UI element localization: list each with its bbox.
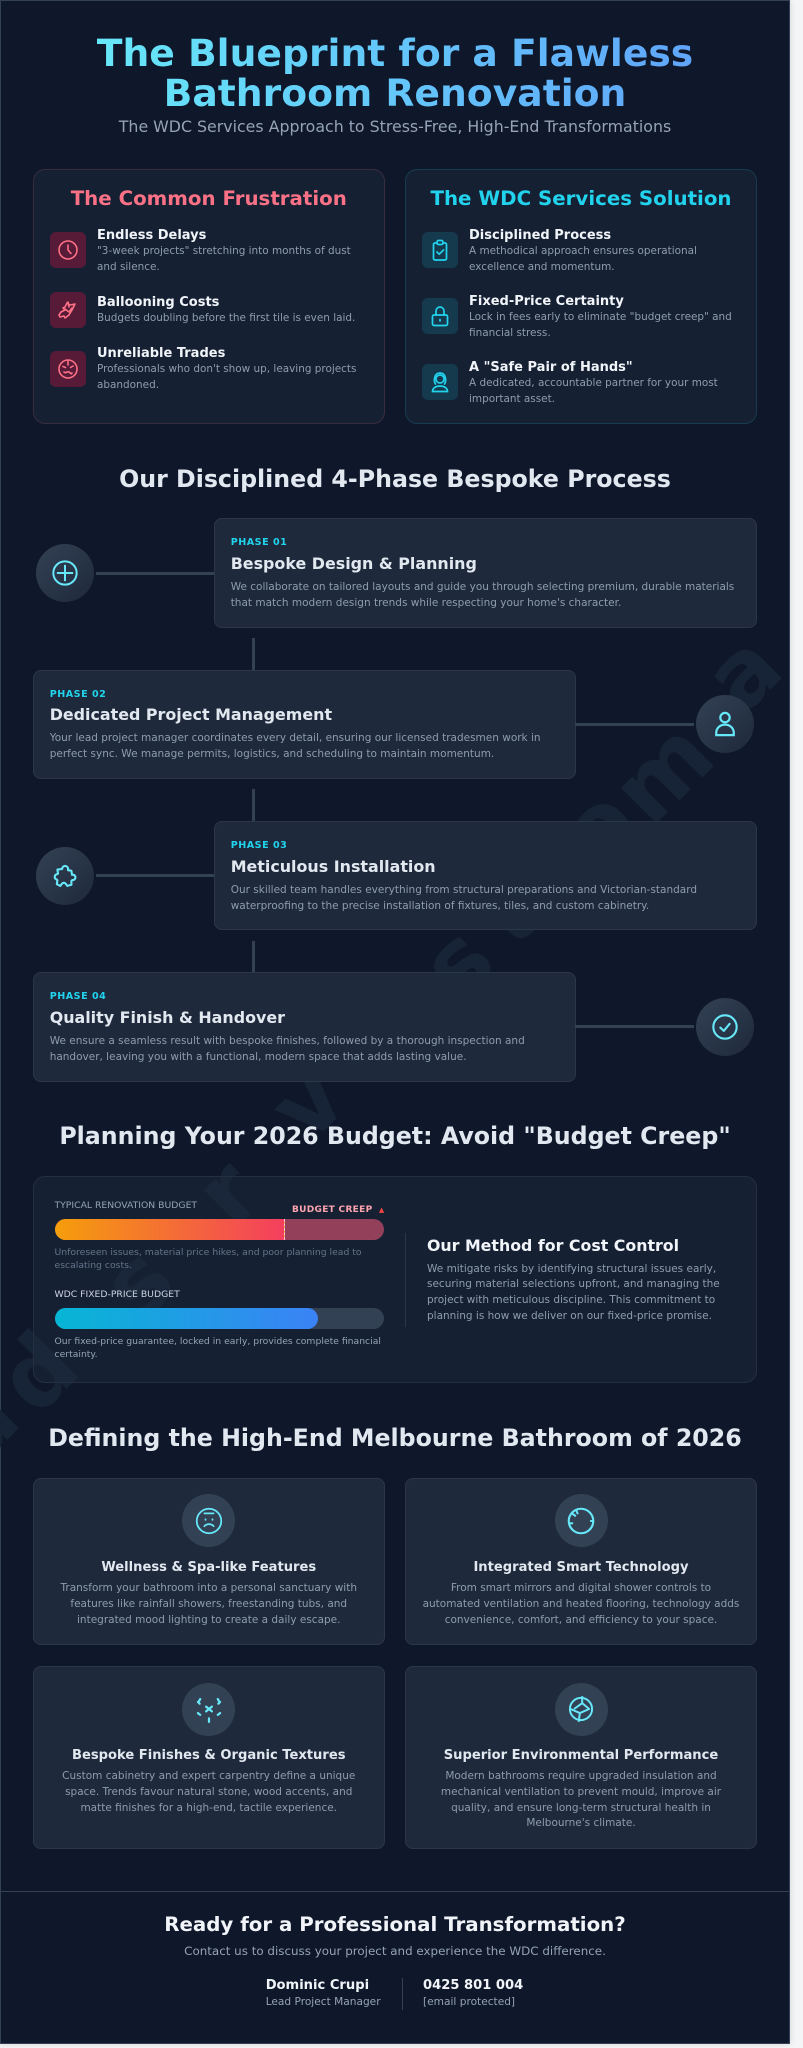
phase text: Our skilled team handles everything from structural preparations and Victorian-standard bbox=[231, 884, 697, 896]
phase title: Bespoke Design & Planning bbox=[231, 554, 477, 573]
item text: Lock in fees early to eliminate "budget creep" and bbox=[469, 311, 732, 323]
item heading: Disciplined Process bbox=[469, 228, 611, 243]
item text bbox=[97, 245, 351, 273]
method text: We mitigate risks by identifying structural issues early, bbox=[427, 1262, 716, 1274]
card text bbox=[441, 1770, 722, 1829]
item text: Professionals who don't show up, leaving projects bbox=[97, 363, 356, 375]
phase text: perfect sync. We manage permits, logistics, and scheduling to maintain momentum. bbox=[50, 748, 494, 760]
bar caption bbox=[54, 1336, 381, 1360]
panel heading: The Common Frustration bbox=[71, 187, 347, 210]
bar caption: Unforeseen issues, material price hikes, and poor planning lead to bbox=[54, 1246, 362, 1258]
card text bbox=[62, 1770, 355, 1814]
title: Bathroom Renovation bbox=[164, 71, 626, 115]
phase label: PHASE 04 bbox=[50, 990, 106, 1002]
item text: excellence and momentum. bbox=[469, 261, 615, 273]
card text: automated ventilation and heated flooring, technology adds bbox=[423, 1598, 739, 1610]
method text: planning is how we deliver on our fixed-price promise. bbox=[427, 1310, 712, 1322]
connector bbox=[96, 572, 214, 574]
section heading: process: Our Disciplined 4-Phase Bespoke Process bbox=[119, 465, 671, 493]
panel: common frustration bbox=[33, 169, 384, 424]
icon: lock bbox=[422, 298, 458, 334]
bar: typical budget bbox=[54, 1219, 384, 1240]
phase label: PHASE 01 bbox=[231, 536, 287, 548]
item heading: Unreliable Trades bbox=[97, 346, 225, 361]
icon: phase 4 check circle bbox=[696, 998, 754, 1056]
card text: mechanical ventilation to prevent mould, improve air bbox=[441, 1786, 721, 1798]
item text: A methodical approach ensures operational bbox=[469, 245, 697, 257]
card: bespoke finishes bbox=[33, 1666, 384, 1848]
bar fill bbox=[54, 1219, 285, 1240]
item text: A dedicated, accountable partner for your most bbox=[469, 377, 718, 389]
footer heading: Ready for a Professional Transformation? bbox=[164, 1913, 626, 1936]
item: safe pair of hands bbox=[422, 360, 718, 405]
watermark: i bbox=[314, 999, 412, 1097]
phase title: Meticulous Installation bbox=[231, 857, 436, 876]
item text: important asset. bbox=[469, 393, 555, 405]
icon: agent bbox=[422, 364, 458, 400]
watermark: m bbox=[591, 701, 734, 844]
item text bbox=[469, 311, 732, 339]
icon: ballooning bbox=[50, 292, 86, 328]
method text: securing material selections upfront, and managing the bbox=[427, 1278, 720, 1290]
contact email: [email protected] bbox=[423, 1996, 515, 2008]
connector bbox=[96, 874, 214, 877]
item text: abandoned. bbox=[97, 379, 159, 391]
card: wellness bbox=[33, 1478, 384, 1644]
item heading: Endless Delays bbox=[97, 228, 206, 243]
icon: clock bbox=[50, 232, 86, 268]
phase text bbox=[231, 581, 734, 609]
card: phase 2 bbox=[33, 670, 576, 778]
item heading: A "Safe Pair of Hands" bbox=[469, 360, 633, 375]
phase text: waterproofing to the precise installation of fixtures, tiles, and custom cabinetry. bbox=[231, 900, 649, 912]
item text: Budgets doubling before the first tile is even laid. bbox=[97, 312, 355, 324]
phase text bbox=[231, 884, 697, 912]
card: phase 4 bbox=[33, 972, 576, 1082]
item: disciplined process bbox=[422, 228, 697, 273]
card: environmental performance bbox=[405, 1666, 757, 1848]
phase text: We collaborate on tailored layouts and guide you through selecting premium, durable materials bbox=[231, 581, 734, 593]
card text: matte finishes for a high-end, tactile experience. bbox=[80, 1802, 337, 1814]
phase text: Your lead project manager coordinates every detail, ensuring our licensed tradesmen work in bbox=[50, 732, 541, 744]
phase text bbox=[50, 1035, 525, 1063]
card text: Custom cabinetry and expert carpentry define a unique bbox=[62, 1770, 355, 1782]
method text bbox=[427, 1262, 720, 1322]
card text: Melbourne's climate. bbox=[526, 1817, 636, 1829]
watermark: t bbox=[454, 859, 561, 966]
icon: sparkle bbox=[182, 1682, 235, 1736]
icon: phase 3 puzzle bbox=[36, 846, 94, 904]
panel: WDC solution bbox=[405, 169, 757, 424]
card title: Bespoke Finishes & Organic Textures bbox=[72, 1748, 346, 1762]
item text: "3-week projects" stretching into months of dust bbox=[97, 245, 351, 257]
watermark: o bbox=[538, 768, 658, 888]
card text: space. Trends favour natural stone, wood accents, and bbox=[65, 1786, 352, 1798]
item text: financial stress. bbox=[469, 327, 551, 339]
card: phase 3 bbox=[214, 821, 757, 930]
icon: phase 1 plus circle bbox=[36, 544, 94, 602]
card: phase 1 bbox=[214, 518, 757, 628]
footer bbox=[1, 1891, 789, 2043]
contact phone: 0425 801 004 bbox=[423, 1978, 523, 1993]
item: fixed-price certainty bbox=[422, 294, 732, 339]
divider bbox=[405, 1233, 406, 1327]
phase label: PHASE 03 bbox=[231, 840, 287, 850]
icon: ring bbox=[554, 1494, 608, 1547]
item text bbox=[469, 245, 697, 273]
label: fixed price: WDC FIXED-PRICE BUDGET bbox=[54, 1289, 180, 1300]
phase text bbox=[50, 732, 541, 760]
label: typical budget: TYPICAL RENOVATION BUDGET bbox=[54, 1200, 197, 1211]
panel: budget bbox=[33, 1176, 757, 1383]
card text bbox=[60, 1582, 357, 1626]
title bbox=[97, 31, 693, 115]
contact divider bbox=[402, 1978, 403, 2010]
icon: face bbox=[50, 351, 86, 387]
icon: face bbox=[182, 1494, 235, 1547]
card text bbox=[423, 1582, 739, 1626]
contact: phone and email bbox=[423, 1978, 523, 2008]
connector bbox=[575, 1025, 694, 1028]
item text: and silence. bbox=[97, 261, 160, 273]
bar fill bbox=[54, 1308, 318, 1329]
footer subheading: Contact us to discuss your project and experience the WDC difference. bbox=[184, 1944, 606, 1958]
method text: project with meticulous discipline. This commitment to bbox=[427, 1294, 715, 1306]
card text: convenience, comfort, and efficiency to your space. bbox=[445, 1614, 717, 1626]
label: budget creep: BUDGET CREEP ▲ bbox=[292, 1205, 385, 1215]
connector bbox=[252, 789, 254, 821]
item heading: Ballooning Costs bbox=[97, 295, 219, 310]
item: unreliable trades bbox=[50, 346, 356, 391]
icon: phase 2 user bbox=[696, 695, 754, 753]
bar caption bbox=[54, 1246, 362, 1270]
section heading: budget: Planning Your 2026 Budget: Avoid "Budget Creep" bbox=[59, 1122, 731, 1150]
card text: Transform your bathroom into a personal sanctuary with bbox=[60, 1582, 357, 1594]
bar caption: certainty. bbox=[54, 1348, 98, 1360]
icon: clipboard bbox=[422, 232, 458, 268]
card: smart technology bbox=[405, 1478, 757, 1644]
card text: quality, and ensure long-term structural health in bbox=[451, 1802, 711, 1814]
section heading: high-end bathroom: Defining the High-End Melbourne Bathroom of 2026 bbox=[48, 1424, 742, 1452]
title: The Blueprint for a Flawless bbox=[97, 31, 693, 75]
item heading: Fixed-Price Certainty bbox=[469, 294, 624, 309]
phase title: Dedicated Project Management bbox=[50, 705, 332, 724]
phase title: Quality Finish & Handover bbox=[50, 1008, 285, 1027]
contact: name bbox=[266, 1978, 381, 2008]
card title: Wellness & Spa-like Features bbox=[101, 1560, 316, 1574]
item: endless delays bbox=[50, 228, 351, 273]
watermark: r bbox=[174, 1138, 282, 1247]
icon: bolt in circle bbox=[554, 1682, 608, 1736]
card text: features like rainfall showers, freestanding tubs, and bbox=[70, 1598, 347, 1610]
phase label: PHASE 02 bbox=[50, 688, 106, 700]
item text bbox=[97, 363, 356, 391]
item: ballooning costs bbox=[50, 292, 355, 328]
watermark: s bbox=[81, 1226, 195, 1340]
method title: Our Method for Cost Control bbox=[427, 1236, 679, 1255]
bar: fixed budget bbox=[54, 1308, 384, 1329]
connector bbox=[252, 941, 254, 972]
bar caption: escalating costs. bbox=[54, 1260, 132, 1270]
card title: Integrated Smart Technology bbox=[473, 1560, 689, 1574]
item text bbox=[469, 377, 718, 405]
phase text: that match modern design trends while respecting your home's character. bbox=[231, 597, 621, 609]
card text: integrated mood lighting to create a daily escape. bbox=[77, 1614, 340, 1626]
card text: Modern bathrooms require upgraded insulation and bbox=[445, 1770, 717, 1782]
card text: From smart mirrors and digital shower controls to bbox=[451, 1582, 711, 1594]
card title: Superior Environmental Performance bbox=[444, 1748, 718, 1762]
watermark: s bbox=[401, 906, 515, 1020]
connector bbox=[575, 722, 694, 726]
bar caption: Our fixed-price guarantee, locked in early, provides complete financial bbox=[54, 1336, 381, 1346]
connector bbox=[252, 638, 254, 670]
watermark: v bbox=[249, 1044, 367, 1162]
panel heading: The WDC Services Solution bbox=[430, 187, 732, 210]
contact name: Dominic Crupi bbox=[266, 1978, 369, 1993]
contact role: Lead Project Manager bbox=[266, 1996, 381, 2008]
phase text: handover, leaving you with a functional, modern space that adds lasting value. bbox=[50, 1051, 467, 1063]
phase text: We ensure a seamless result with bespoke finishes, followed by a thorough inspection and bbox=[50, 1035, 525, 1047]
subtitle: The WDC Services Approach to Stress-Free, High-End Transformations bbox=[119, 117, 671, 136]
